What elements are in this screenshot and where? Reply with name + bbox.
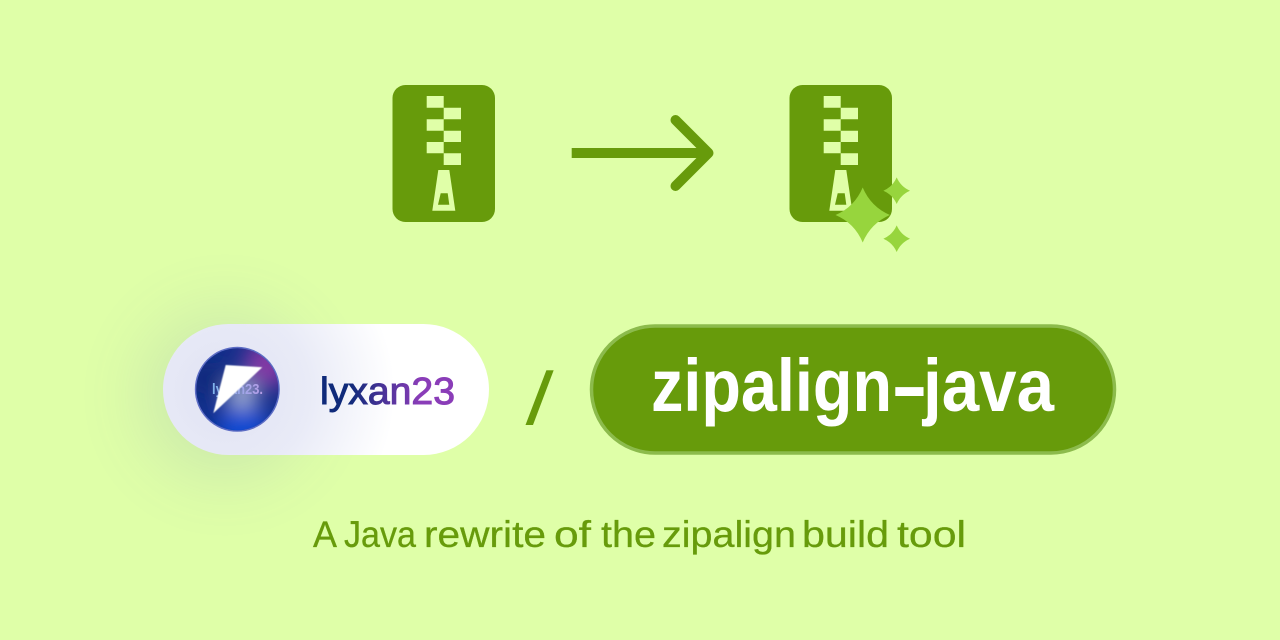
project name <box>651 344 1055 427</box>
icon: sparkles <box>836 177 910 252</box>
tagline <box>313 514 966 555</box>
glow behind author pill <box>140 310 310 480</box>
tagline: A <box>313 514 337 555</box>
tagline: Java <box>344 514 416 555</box>
slash separator: / <box>525 357 555 441</box>
arrow <box>572 120 708 186</box>
tagline: rewrite <box>424 514 546 555</box>
author name: lyxan23 <box>320 371 455 413</box>
icon: zip file (original) <box>392 85 495 222</box>
tagline: of <box>554 514 592 555</box>
tagline: tool <box>897 514 966 555</box>
tagline: zipalign <box>662 514 796 555</box>
project name: - <box>891 344 928 427</box>
logo wordmark: lyxan23. <box>212 382 263 398</box>
logo white shard <box>213 365 262 413</box>
icon: zip file (aligned, with sparkles) <box>790 85 910 252</box>
tagline: build <box>802 514 889 555</box>
author pill: lyxan23 <box>163 324 489 455</box>
project name: java <box>921 344 1055 427</box>
logo orb <box>194 346 280 432</box>
project pill: zipalign-java <box>592 326 1114 453</box>
banner canvas <box>138 85 1116 555</box>
tagline: the <box>601 514 656 555</box>
project name: zipalign <box>651 344 892 427</box>
